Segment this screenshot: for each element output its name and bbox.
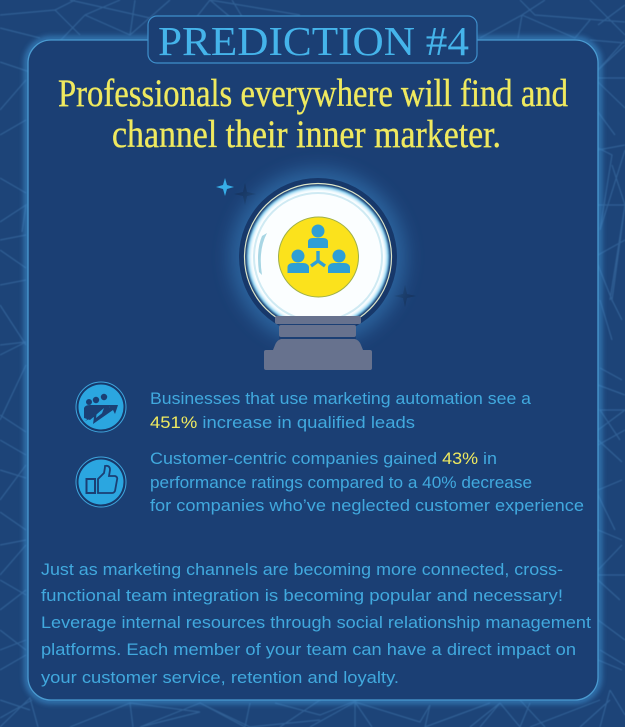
text: closing paragraph: Just as marketing channels are becoming more connected, cross- xyxy=(41,561,563,579)
heading xyxy=(58,72,568,156)
text: automation stat: Businesses that use marketing automation see a xyxy=(150,389,532,408)
text: customer-centric stat: for companies who’ve neglected customer experience xyxy=(150,496,584,515)
icon: team network xyxy=(278,217,358,297)
text: customer-centric stat xyxy=(150,449,584,515)
text: closing paragraph: your customer service, retention and loyalty. xyxy=(41,669,399,687)
crystal ball illustration xyxy=(230,169,406,370)
icon: growth team xyxy=(76,382,126,432)
text: closing paragraph: functional team integration is becoming popular and necessary! xyxy=(41,587,563,605)
text: customer-centric stat: performance ratings compared to a 40% decrease xyxy=(150,473,532,492)
text: closing paragraph: platforms. Each member of your team can have a direct impact on xyxy=(41,641,576,659)
icon: bright star xyxy=(216,178,234,196)
icon: dark star right xyxy=(394,285,416,307)
text: closing paragraph: Leverage internal resources through social relationship management xyxy=(41,614,591,632)
text: closing paragraph xyxy=(41,561,591,687)
text: customer-centric stat: Customer-centric companies gained 43% in xyxy=(150,449,497,468)
text: automation stat: 451% increase in qualified leads xyxy=(150,413,415,432)
icon: thumbs up xyxy=(76,457,126,507)
heading: channel their inner marketer. xyxy=(112,113,501,156)
crystal ball stand xyxy=(264,316,372,370)
text: automation stat xyxy=(150,389,532,432)
icon: dark star xyxy=(234,183,256,205)
title: PREDICTION #4 xyxy=(158,18,469,64)
